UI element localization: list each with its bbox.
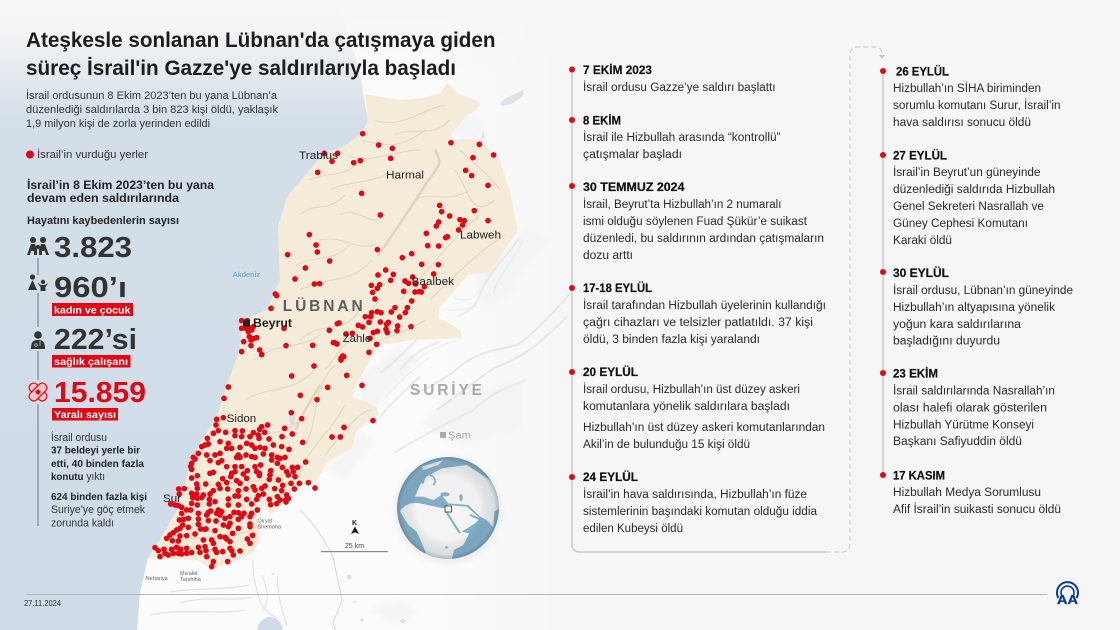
neighbouring land (130, 0, 570, 630)
event: 17-18 Eylül: öldü, 3 binden fazla kişi yaralandı (583, 334, 760, 346)
event: 27 Eylül: 27 EYLÜL (893, 150, 947, 162)
event: 24 Eylül: İsrail’in hava saldırısında, Hizbullah’ın füze (583, 488, 807, 501)
title: süreç İsrail'in Gazze'ye saldırılarıyla başladı (26, 56, 456, 80)
event: 23 Ekim (880, 368, 1055, 448)
icon: bandage (27, 381, 49, 403)
event: 30 Temmuz 2024: ismi olduğu söylenen Fuad Şükür’e suikast (583, 216, 808, 228)
strike dots: south (155, 356, 373, 567)
label: Ma'alot Tarshiha: Ma'alot (180, 571, 198, 577)
Africa and Arabia (400, 503, 480, 563)
event: 26 Eylül: Hizbullah’ın SİHA biriminden (893, 82, 1041, 95)
Sea of Galilee (257, 617, 283, 630)
panel heading: devam eden saldırılarında (27, 193, 180, 205)
event: 30 Eylül: İsrail ordusu, Lübnan’ın güneyinde (893, 284, 1073, 297)
label: Baalbek: Baalbek (412, 276, 455, 288)
event: 17 Kasım (880, 470, 1061, 516)
note: displaced people: zorunda kaldı (51, 518, 114, 530)
stat: women and children: 960’ı (54, 272, 127, 304)
stat: health workers: 222’si (54, 324, 137, 356)
terrain relief on Lebanon (170, 105, 505, 545)
label: Sidon: Sidon (227, 413, 256, 425)
event: 20 Eylül: İsrail ordusu, Hizbullah’ın üst düzey askeri (583, 383, 800, 396)
note: displaced people (51, 491, 147, 530)
event: 23 Ekim: Başkanı Safiyuddin öldü (893, 436, 1022, 448)
event: 23 Ekim: 23 EKİM (893, 368, 938, 380)
event: 17 Kasım: 17 KASIM (893, 470, 945, 482)
panel heading: İsrail’in 8 Ekim 2023’ten bu yana (27, 179, 215, 192)
map labels (146, 150, 501, 583)
subtitle: düzenlediği saldırılarda 3 bin 823 kişi öldü, yaklaşık (26, 104, 278, 116)
event: 24 Eylül: sistemlerinin başındaki komutan olduğu iddia (583, 506, 818, 518)
timeline line: left column (572, 69, 826, 552)
timeline connector (37, 258, 39, 526)
subtitle: İsrail ordusunun 8 Ekim 2023’ten bu yana Lübnan’a (26, 89, 278, 102)
Litani lake (289, 408, 295, 426)
label: Ma'alot Tarshiha (180, 571, 202, 583)
event: 20 Eylül (569, 366, 825, 451)
event: 23 Ekim: olası halefi olarak gösterilen (893, 402, 1047, 414)
event: 23 Ekim: Hizbullah Yürütme Konseyi (893, 420, 1034, 432)
event: 27 Eylül: İsrail’in Beyrut’un güneyinde (893, 166, 1040, 179)
label: Nehariya: Nehariya (146, 576, 169, 582)
blurred urban and mountain patches (325, 110, 553, 625)
event: 7 Ekim 2023: İsrail ordusu Gazze’ye saldırı başlattı (583, 81, 776, 94)
event: 20 Eylül: Akil’in de bulunduğu 15 kişi öldü (583, 439, 750, 451)
subtitle (26, 89, 278, 130)
Lebanon territory (148, 83, 518, 569)
event: 24 Eylül (569, 471, 818, 535)
label: Trablus: Trablus (299, 150, 339, 162)
sea: Mediterranean (0, 0, 368, 630)
event: 8 Ekim: 8 EKİM (583, 114, 621, 128)
small lakes (272, 89, 524, 623)
event: 30 Eylül: 30 EYLÜL (893, 267, 949, 280)
event: 8 Ekim: İsrail ile Hizbullah arasında “kontrollü” (583, 131, 781, 144)
label: Şam (440, 430, 471, 442)
event: 27 Eylül: Güney Cephesi Komutanı (893, 218, 1028, 230)
label: wounded: Yaralı sayısı (54, 409, 116, 421)
terrain: Syria and Israel relief (150, 89, 570, 630)
event: 8 Ekim (569, 114, 781, 161)
event: 8 Ekim: çatışmalar başladı (583, 149, 682, 161)
logo: Anadolu Agency: AA (1057, 592, 1079, 607)
stat: total deaths: 3.823 (54, 232, 132, 264)
label: Lübnan: LÜBNAN (283, 298, 363, 315)
label: health workers: sağlık çalışanı (54, 356, 128, 368)
event: 30 Temmuz 2024 (569, 182, 824, 262)
event: 27 Eylül: Karaki öldü (893, 235, 952, 247)
label: Qiryat Shemona: Shemona (258, 524, 282, 530)
deaths heading: Hayatını kaybedenlerin sayısı (27, 215, 179, 227)
subtitle: 1,9 milyon kişi de zorla yerinden edildi (26, 118, 210, 130)
label: Akdeniz: Akdeniz (233, 270, 260, 279)
event: 17-18 Eylül: 17-18 EYLÜL (583, 282, 652, 295)
compass: K (352, 520, 357, 527)
event: 30 Eylül: Hizbullah’ın altyapısına yönelik (893, 302, 1055, 314)
logo: Anadolu Agency (1057, 582, 1079, 607)
panel: casualties (27, 179, 215, 530)
label: Şam: Şam (448, 430, 471, 442)
event: 17-18 Eylül: İsrail tarafından Hizbullah üyelerinin kullandığı (583, 299, 826, 312)
event: 23 Ekim: İsrail saldırılarında Nasrallah’ın (893, 384, 1055, 398)
map: Lebanon (148, 83, 518, 569)
scale bar: 25 km (345, 543, 364, 550)
strike dots: north and Bekaa (242, 134, 494, 358)
event: 20 Eylül: komutanlara yönelik saldırılara başladı (583, 401, 790, 413)
event: 27 Eylül: düzenlediği saldırıda Hizbullah (893, 184, 1055, 196)
event: 26 Eylül: 26 EYLÜL (896, 66, 949, 78)
border line (300, 510, 342, 630)
event: 26 Eylül: sorumlu komutanı Surur, İsrail’in (893, 99, 1060, 112)
label: Qiryat Shemona: Qiryat (258, 518, 273, 524)
note: destroyed towns: yıktı (86, 471, 105, 483)
timeline: left column (569, 64, 826, 535)
ridge detail (387, 240, 570, 410)
legend: strike locations: İsrail’in vurduğu yerler (37, 148, 148, 161)
event: 20 Eylül: Hizbullah’ın üst düzey askeri komutanlarından (583, 422, 825, 434)
event: 24 Eylül: edilen Kubeysi öldü (583, 523, 683, 535)
label: women and children: kadın ve çocuk (54, 304, 131, 316)
event: 17 Kasım: Afif İsrail’in suikasti sonucu öldü (893, 503, 1061, 516)
date: 27.11.2024 (24, 598, 61, 608)
note: displaced people: 624 binden fazla kişi (51, 491, 147, 503)
stat: wounded: 15.859 (54, 377, 146, 409)
timeline connector: dashed arrow to right column (826, 47, 885, 552)
event: 30 Temmuz 2024: dozu arttı (583, 250, 633, 262)
note: destroyed towns (51, 431, 144, 483)
ridges blurred (380, 237, 570, 453)
southern relief (150, 510, 342, 630)
event: 17 Kasım: Hizbullah Medya Sorumlusu (893, 487, 1041, 499)
event: 30 Temmuz 2024: İsrail, Beyrut’ta Hizbullah’ın 2 numaralı (583, 198, 782, 211)
inland and coastal waters (430, 475, 480, 533)
note: destroyed towns: İsrail ordusu (51, 431, 107, 444)
note: destroyed towns: etti, 40 binden fazla (51, 458, 144, 470)
footer rule (26, 594, 1048, 595)
event: 26 Eylül: hava saldırısı sonucu öldü (893, 117, 1031, 129)
panel heading (27, 179, 215, 205)
globe locator (394, 456, 502, 564)
event: 30 Eylül: yoğun kara saldırılarına (893, 319, 1022, 331)
note: displaced people: Suriye’ye göç etmek (51, 504, 145, 516)
icon: family (27, 237, 49, 255)
event: 17-18 Eylül: çağrı cihazları ve telsizler patlatıldı. 37 kişi (583, 317, 813, 329)
label: Labweh: Labweh (460, 230, 501, 242)
note: destroyed towns: 37 beldeyi yerle bir (51, 444, 140, 456)
icon: health worker (31, 331, 45, 349)
scale bar (321, 543, 388, 552)
title: Ateşkesle sonlanan Lübnan'da çatışmaya giden (26, 28, 496, 52)
event: 24 Eylül: 24 EYLÜL (583, 471, 638, 484)
event: 30 Temmuz 2024: düzenledi, bu saldırının ardından çatışmaların (583, 233, 824, 245)
event: 26 Eylül (880, 66, 1060, 129)
timeline: right column (880, 66, 1073, 516)
timeline line: right column (882, 71, 884, 475)
label: Zahle: Zahle (343, 333, 371, 345)
label: Sur: Sur (163, 493, 181, 505)
Eurasia (415, 465, 502, 527)
note: destroyed towns: konutu (51, 471, 84, 483)
compass (351, 520, 359, 534)
label: Ma'alot Tarshiha: Tarshiha (180, 577, 202, 583)
label: Qiryat Shemona (258, 518, 282, 530)
event: 30 Eylül (880, 267, 1073, 348)
event: 7 Ekim 2023: 7 EKİM 2023 (583, 64, 652, 77)
event: 30 Eylül: başladığını duyurdu (893, 336, 1000, 348)
icon: woman and child (28, 274, 48, 291)
event: 17-18 Eylül (569, 282, 826, 346)
event: 27 Eylül: Genel Sekreteri Nasrallah ve (893, 201, 1044, 213)
label: Beyrut: Beyrut (253, 318, 292, 330)
title (26, 28, 496, 80)
label: Harmal: Harmal (386, 170, 424, 182)
event: 7 Ekim 2023 (569, 64, 776, 94)
label: Suriye: SURİYE (410, 382, 482, 399)
arctic land (422, 460, 443, 470)
event: 20 Eylül: 20 EYLÜL (583, 366, 638, 379)
event: 27 Eylül (880, 150, 1055, 247)
event: 30 Temmuz 2024: 30 TEMMUZ 2024 (583, 182, 685, 194)
